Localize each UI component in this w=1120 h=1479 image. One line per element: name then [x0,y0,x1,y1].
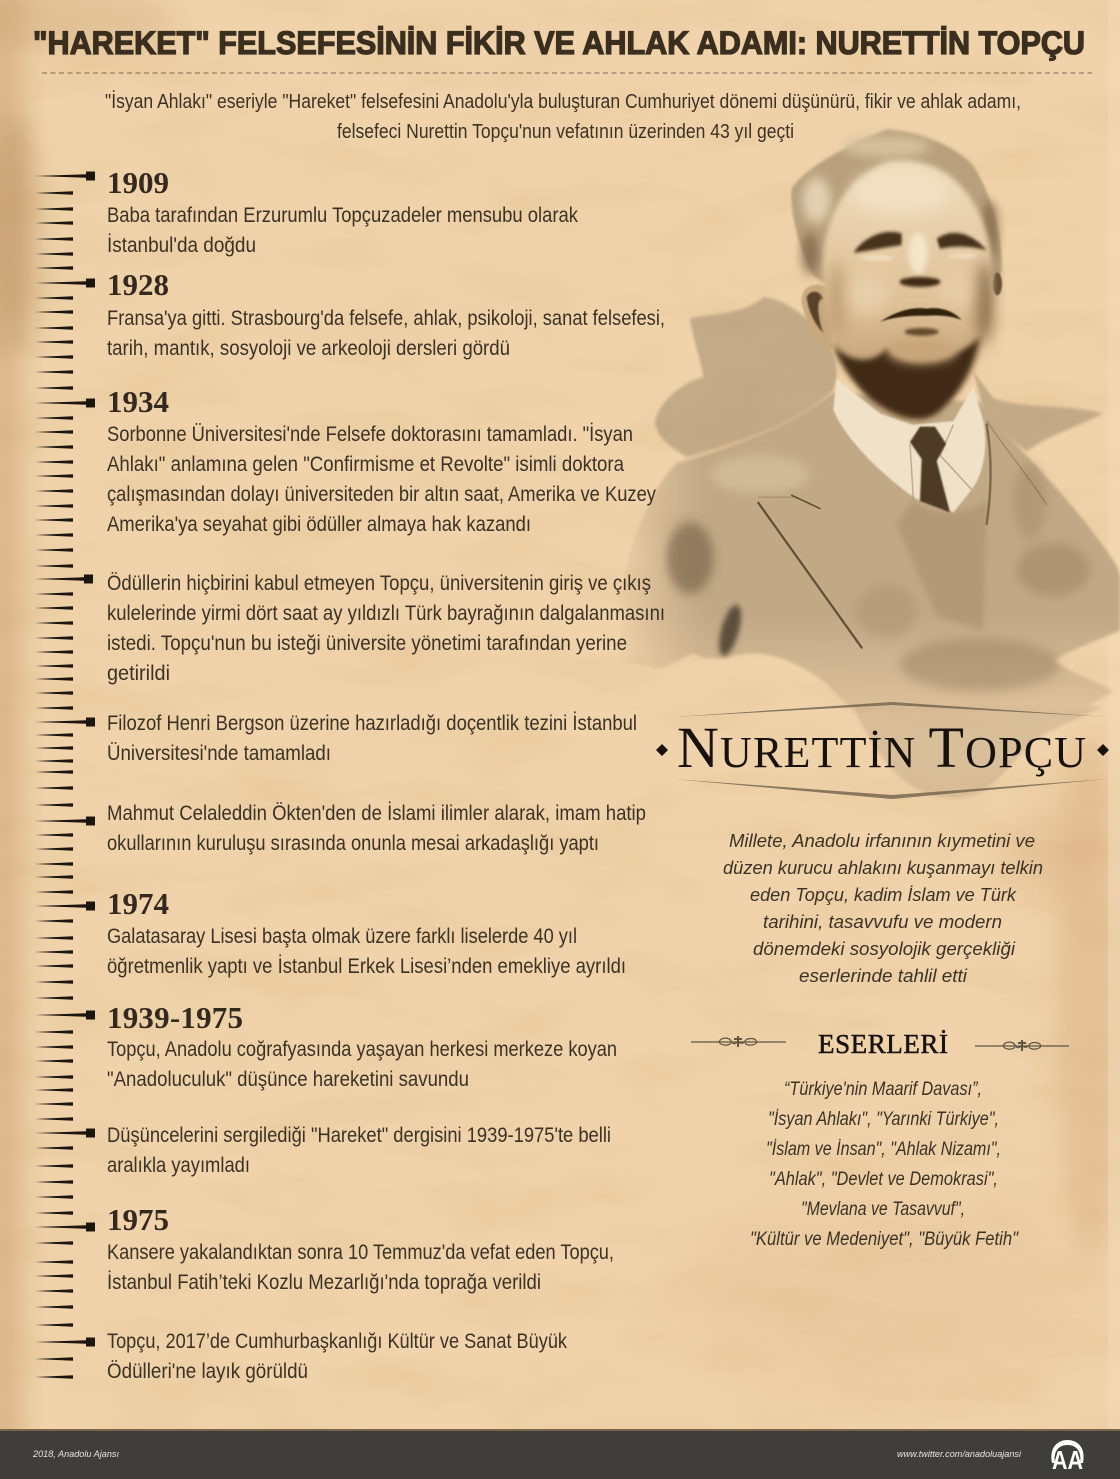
icon: Anadolu Agency logo: AA [1052,1445,1083,1475]
timeline entry: 1974 [107,886,626,978]
biography paragraph: Millete, Anadolu irfanının kıymetini ve [729,831,1035,851]
timeline entry: Bergson thesis: Üniversitesi'nde tamamladı [107,741,331,765]
timeline entry: 1939-1975 [107,1000,617,1091]
jacket [620,392,1120,710]
timeline entry: 1928 [107,267,665,360]
works heading [691,1029,1069,1059]
timeline entry: Hareket journal: Düşüncelerini sergilediği "Hareket" dergisini 1939-1975'te belli [107,1123,611,1147]
title: "HAREKET" FELSEFESİNİN FİKİR VE AHLAK ADAMI: NURETTİN TOPÇU [33,25,1085,61]
timeline entry: 1909 [107,165,578,257]
works list: "Kültür ve Medeniyet", "Büyük Fetih" [750,1228,1019,1250]
timeline entry: 1934 [107,384,656,536]
timeline entry: Bergson thesis [107,711,637,765]
timeline entry: 1939-1975: Topçu, Anadolu coğrafyasında yaşayan herkesi merkeze koyan [107,1037,617,1061]
timeline entry: Mahmut Celaleddin Ökten: okullarının kuruluşu sırasında onunla mesai arkadaşlığı yaptı [107,831,599,855]
portrait: Nurettin Topçu [620,130,1120,798]
timeline entry: 1928: 1928 [107,267,169,302]
biography paragraph: eden Topçu, kadim İslam ve Türk [750,885,1017,905]
timeline entry: awards: istedi. Topçu'nun bu isteği üniversite yönetimi tarafından yerine [107,631,627,655]
timeline entry: Mahmut Celaleddin Ökten: Mahmut Celaleddin Ökten'den de İslami ilimler alarak, imam hatip [107,801,646,825]
lapels [758,421,1047,648]
timeline entry: 2017 award: Topçu, 2017’de Cumhurbaşkanlığı Kültür ve Sanat Büyük [107,1329,567,1353]
necktie [910,427,950,512]
timeline entry: 1928: tarih, mantık, sosyoloji ve arkeoloji dersleri gördü [107,336,510,360]
shirt collar [833,379,985,512]
ornament left [691,1036,786,1047]
biography paragraph: tarihini, tasavvufu ve modern [763,912,1002,932]
timeline entry: 1928: Fransa'ya gitti. Strasbourg'da felsefe, ahlak, psikoloji, sanat felsefesi, [107,306,665,330]
timeline entry: awards: getirildi [107,661,170,685]
timeline entry: 1934: Sorbonne Üniversitesi'nde Felsefe doktorasını tamamladı. "İsyan [107,422,633,446]
timeline entry: 1975 [107,1202,614,1294]
jacket shading [667,455,1090,691]
works list: "Ahlak", "Devlet ve Demokrasi", [769,1168,998,1190]
intro text: felsefeci Nurettin Topçu'nun vefatının üzerinden 43 yıl geçti [337,121,794,143]
timeline entry: 1909: Baba tarafından Erzurumlu Topçuzadeler mensubu olarak [107,203,578,227]
timeline entry: 1934: Amerika'ya seyahat gibi ödüller almaya hak kazandı [107,512,531,536]
face [823,161,993,419]
timeline entry: 1974: Galatasaray Lisesi başta olmak üzere farklı liselerde 40 yıl [107,924,577,948]
timeline entry: 1934: Ahlakı" anlamına gelen "Confirmisme et Revolte" isimli doktora [107,452,624,476]
timeline entry: Hareket journal: aralıkla yayımladı [107,1153,250,1177]
timeline entry: 1909: İstanbul'da doğdu [107,233,256,257]
timeline entry: 1975: 1975 [107,1202,169,1237]
timeline entry: Bergson thesis: Filozof Henri Bergson üzerine hazırladığı doçentlik tezini İstanbul [107,711,637,735]
timeline entry: 1974: 1974 [107,886,169,921]
ink stains behind portrait [655,297,1103,798]
beard shadow [833,337,980,419]
timeline entry: 2017 award: Ödülleri'ne layık görüldü [107,1359,308,1383]
ears [802,285,833,349]
works list: "Mevlana ve Tasavvuf", [801,1198,965,1220]
footer: 2018, Anadolu Ajansı [32,1449,119,1459]
mouth [880,308,962,322]
works heading: ESERLERİ [818,1029,948,1059]
biography paragraph: dönemdeki sosyolojik gerçekliği [753,939,1016,959]
timeline entry: Hareket journal [107,1123,611,1177]
name banner: NURETTİN TOPÇU [677,715,1086,780]
works list: "İslam ve İnsan", "Ahlak Nizamı", [766,1138,1001,1160]
eyes and brows [853,232,987,253]
timeline entry: 1934: 1934 [107,384,169,419]
intro text [105,90,1021,143]
name banner [656,702,1109,799]
ornament right [975,1040,1069,1051]
timeline entry: 1974: öğretmenlik yaptı ve İstanbul Erkek Lisesi’nden emekliye ayrıldı [107,954,626,978]
timeline entry: awards: kulelerinde yirmi dört saat ay yıldızlı Türk bayrağının dalgalanmasını [107,601,665,625]
timeline entry: 1939-1975: "Anadoluculuk" düşünce hareketini savundu [107,1067,469,1091]
timeline entry: 1939-1975: 1939-1975 [107,1000,243,1035]
timeline entry: 1934: çalışmasından dolayı üniversiteden bir altın saat, Amerika ve Kuzey [107,482,656,506]
timeline entry: awards [107,571,665,685]
timeline entry: Mahmut Celaleddin Ökten [107,801,646,855]
footer [0,1429,1120,1479]
hair [791,130,1002,284]
intro text: "İsyan Ahlakı" eseriyle "Hareket" felsefesini Anadolu'yla buluşturan Cumhuriyet dönemi düşünürü, fikir ve ahlak adamı, [105,90,1021,113]
timeline entry: 1909: 1909 [107,165,169,200]
timeline ruler [35,172,95,1379]
works list: "İsyan Ahlakı", "Yarınki Türkiye", [768,1108,999,1130]
timeline entry: awards: Ödüllerin hiçbirini kabul etmeyen Topçu, üniversitenin giriş ve çıkış [107,571,651,595]
timeline entry: 1975: İstanbul Fatih’teki Kozlu Mezarlığı'nda toprağa verildi [107,1270,541,1294]
footer: www.twitter.com/anadoluajansi [897,1449,1022,1459]
timeline markers [35,172,95,1346]
timeline entry: 2017 award [107,1329,567,1383]
biography paragraph: düzen kurucu ahlakını kuşanmayı telkin [723,858,1043,878]
nose [909,232,928,274]
sweater [897,501,987,630]
timeline entry: 1975: Kansere yakalandıktan sonra 10 Temmuz'da vefat eden Topçu, [107,1240,614,1264]
works list [750,1078,1019,1250]
biography paragraph [723,831,1043,986]
biography paragraph: eserlerinde tahlil etti [799,966,968,986]
works list: “Türkiye'nin Maarif Davası”, [784,1078,982,1100]
